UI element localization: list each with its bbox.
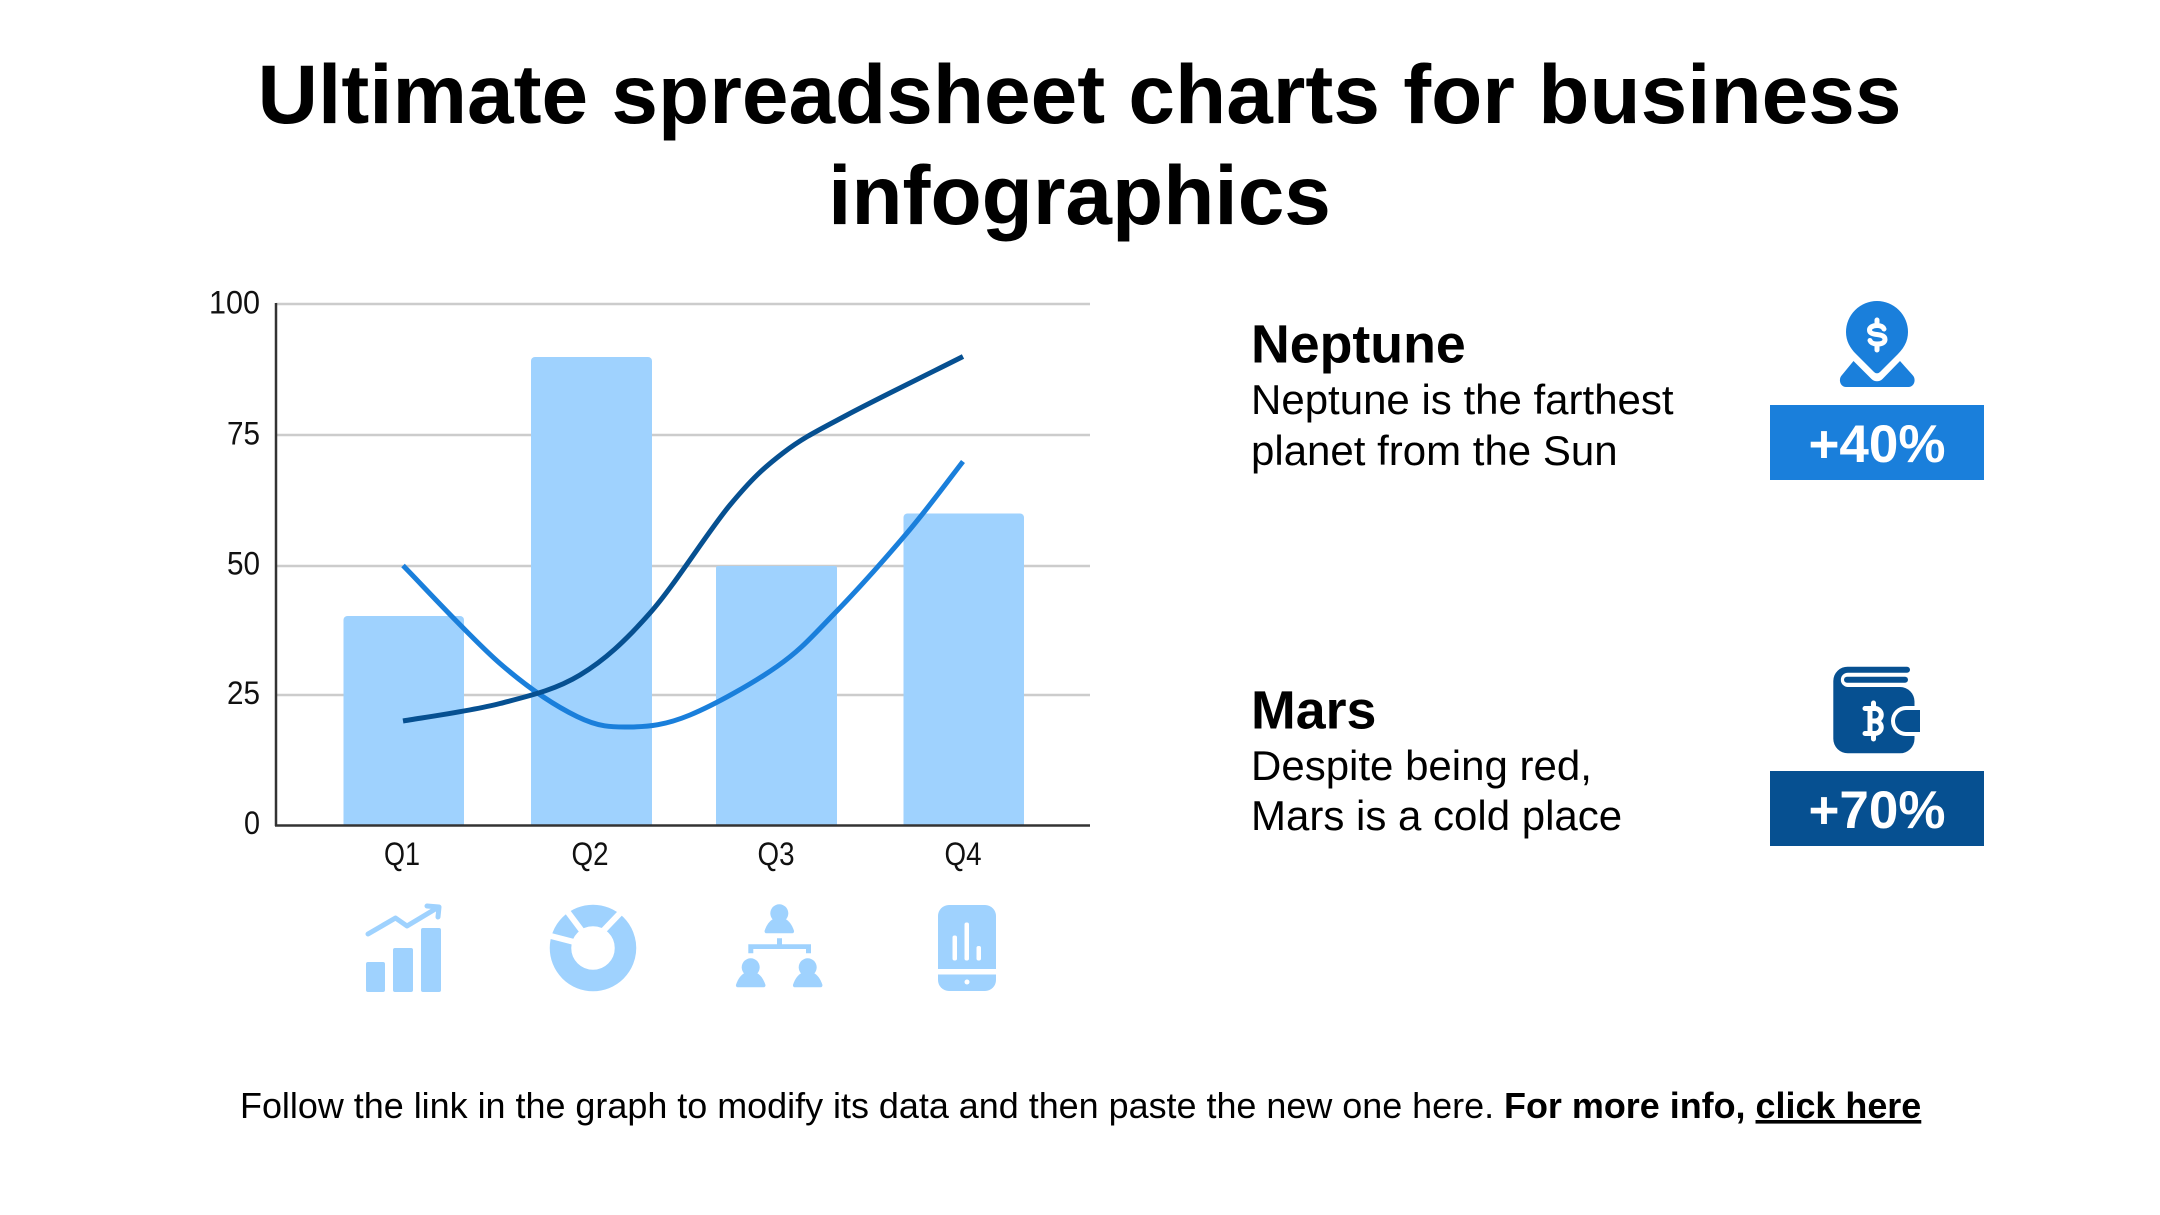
axes xyxy=(275,303,1090,826)
text block: Mars: Mars xyxy=(1251,681,1376,741)
y axis labels: 25 xyxy=(227,675,260,711)
y axis labels: 0 xyxy=(244,805,260,841)
combo chart: bars and lines by quarter xyxy=(209,284,1090,872)
stat badge: +40% xyxy=(1770,405,1984,480)
stat badge: +40%: +40% xyxy=(1808,415,1946,474)
y axis labels: 75 xyxy=(227,416,260,452)
x axis labels: Q2 xyxy=(572,836,608,872)
icon: dollar location pin xyxy=(1840,301,1915,387)
text block: Neptune: planet from the Sun xyxy=(1251,427,1618,474)
x axis labels: Q4 xyxy=(944,836,982,872)
y axis labels: 50 xyxy=(227,546,260,582)
x axis labels: Q3 xyxy=(758,836,794,872)
stat badge: +70%: +70% xyxy=(1808,781,1946,840)
text block: Neptune: Neptune xyxy=(1251,315,1466,375)
line series: dark blue xyxy=(403,356,963,721)
title xyxy=(258,47,1901,242)
text block: Mars: Mars is a cold place xyxy=(1251,792,1622,839)
x axis labels xyxy=(384,836,982,872)
title: infographics xyxy=(828,148,1331,242)
x axis labels: Q1 xyxy=(384,836,420,872)
y axis labels xyxy=(209,284,260,841)
y axis labels: 100 xyxy=(209,284,260,320)
icon: growth bars xyxy=(366,906,441,992)
icon: bitcoin wallet xyxy=(1833,667,1920,753)
icon: donut chart xyxy=(545,907,626,980)
stat badge: +70% xyxy=(1770,771,1984,846)
bars xyxy=(344,357,1024,825)
footer note: Follow the link in the graph to modify its data and then paste the new one here. For more info, click here xyxy=(240,1085,1921,1126)
icon: mobile phone chart xyxy=(938,905,996,991)
text block: Neptune xyxy=(1251,315,1674,474)
text block: Neptune: Neptune is the farthest xyxy=(1251,376,1674,423)
text block: Mars: Despite being red, xyxy=(1251,742,1592,789)
text block: Mars xyxy=(1251,681,1622,839)
icon: organisation hierarchy xyxy=(736,904,822,987)
line series: light blue xyxy=(403,462,963,727)
title: Ultimate spreadsheet charts for business xyxy=(258,47,1901,141)
